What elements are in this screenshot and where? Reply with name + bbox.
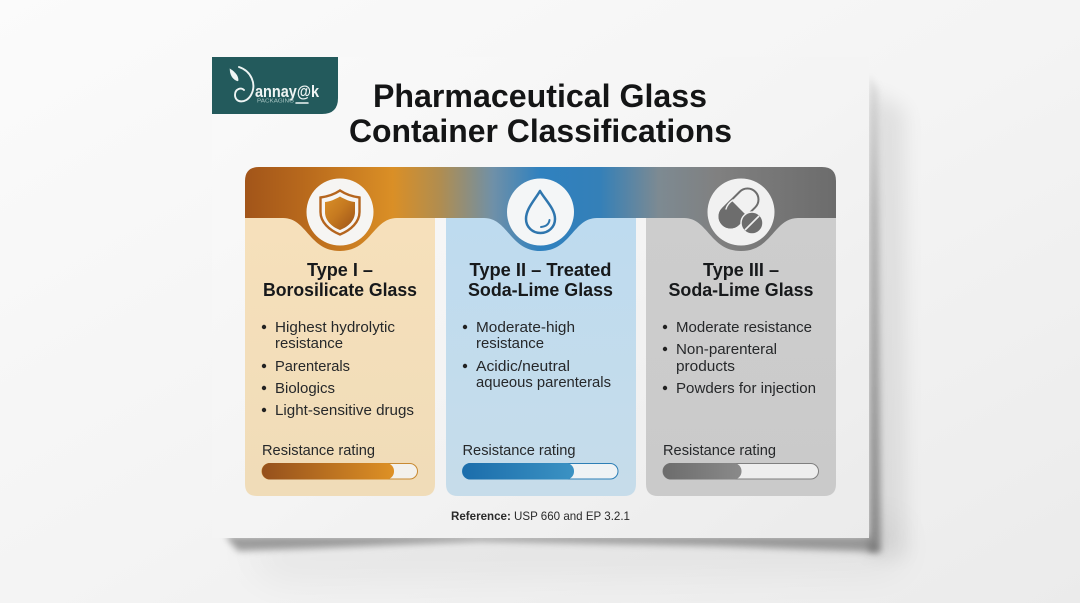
heading: Type I: Type I – xyxy=(307,260,373,280)
title: Pharmaceutical Glass xyxy=(373,78,707,114)
logo wordmark: annay@k xyxy=(255,83,320,101)
bullet list: Type I xyxy=(262,320,414,419)
heading: Type III: Type III – xyxy=(703,260,779,280)
heading: Type II: Soda-Lime Glass xyxy=(468,280,613,300)
logo badge xyxy=(212,57,338,114)
logo subtitle: PACKAGING xyxy=(257,98,294,104)
resistance rating: Type I: Resistance rating xyxy=(262,443,375,459)
bullet list: Type I: Highest hydrolytic xyxy=(275,320,395,336)
heading: Type III: Soda-Lime Glass xyxy=(668,280,814,300)
bullet list: Type II: resistance xyxy=(476,336,544,352)
bullet list: Type II xyxy=(463,320,611,391)
heading: Type II: Type II – Treated xyxy=(470,260,612,280)
gradient header band xyxy=(245,167,836,251)
bullet list: Type III: products xyxy=(676,359,735,375)
reference note: Reference: USP 660 and EP 3.2.1 xyxy=(451,509,630,523)
logo tail xyxy=(296,102,308,104)
bullet list: Type III: Moderate resistance xyxy=(676,320,812,336)
resistance rating: Type I xyxy=(262,443,418,480)
bullet list: Type II: Moderate-high xyxy=(476,320,575,336)
panel: Type II xyxy=(446,218,636,496)
bullet list: Type III: Powders for injection xyxy=(676,381,816,397)
icon: water drop xyxy=(507,178,574,246)
panel: Type I xyxy=(245,218,435,496)
bullet list: Type II: aqueous parenterals xyxy=(476,375,611,391)
bullet list: Type I: Parenterals xyxy=(275,359,350,375)
resistance rating: Type III xyxy=(663,443,818,480)
icon: shield xyxy=(306,178,374,246)
heading: Type I: Borosilicate Glass xyxy=(263,280,417,300)
title xyxy=(349,78,732,149)
paper shadow xyxy=(225,74,905,580)
heading: Type III xyxy=(668,260,814,300)
bullet list: Type III: Non-parenteral xyxy=(676,342,777,358)
bullet list: Type I: Light-sensitive drugs xyxy=(275,403,414,419)
bullet list: Type III xyxy=(663,320,816,397)
heading: Type II xyxy=(468,260,613,300)
bullet list: Type I: Biologics xyxy=(275,381,335,397)
resistance rating: Type II xyxy=(462,443,618,480)
title: Container Classifications xyxy=(349,113,732,149)
heading: Type I xyxy=(263,260,417,300)
panel: Type III xyxy=(646,218,836,496)
resistance rating: Type III: Resistance rating xyxy=(663,443,776,459)
paper sheet xyxy=(212,57,869,538)
resistance rating: Type II: Resistance rating xyxy=(462,443,576,459)
logo mark xyxy=(230,67,253,101)
bullet list: Type II: Acidic/neutral xyxy=(476,359,570,375)
bullet list: Type I: resistance xyxy=(275,336,343,352)
icon: capsule and tablet xyxy=(708,178,774,246)
